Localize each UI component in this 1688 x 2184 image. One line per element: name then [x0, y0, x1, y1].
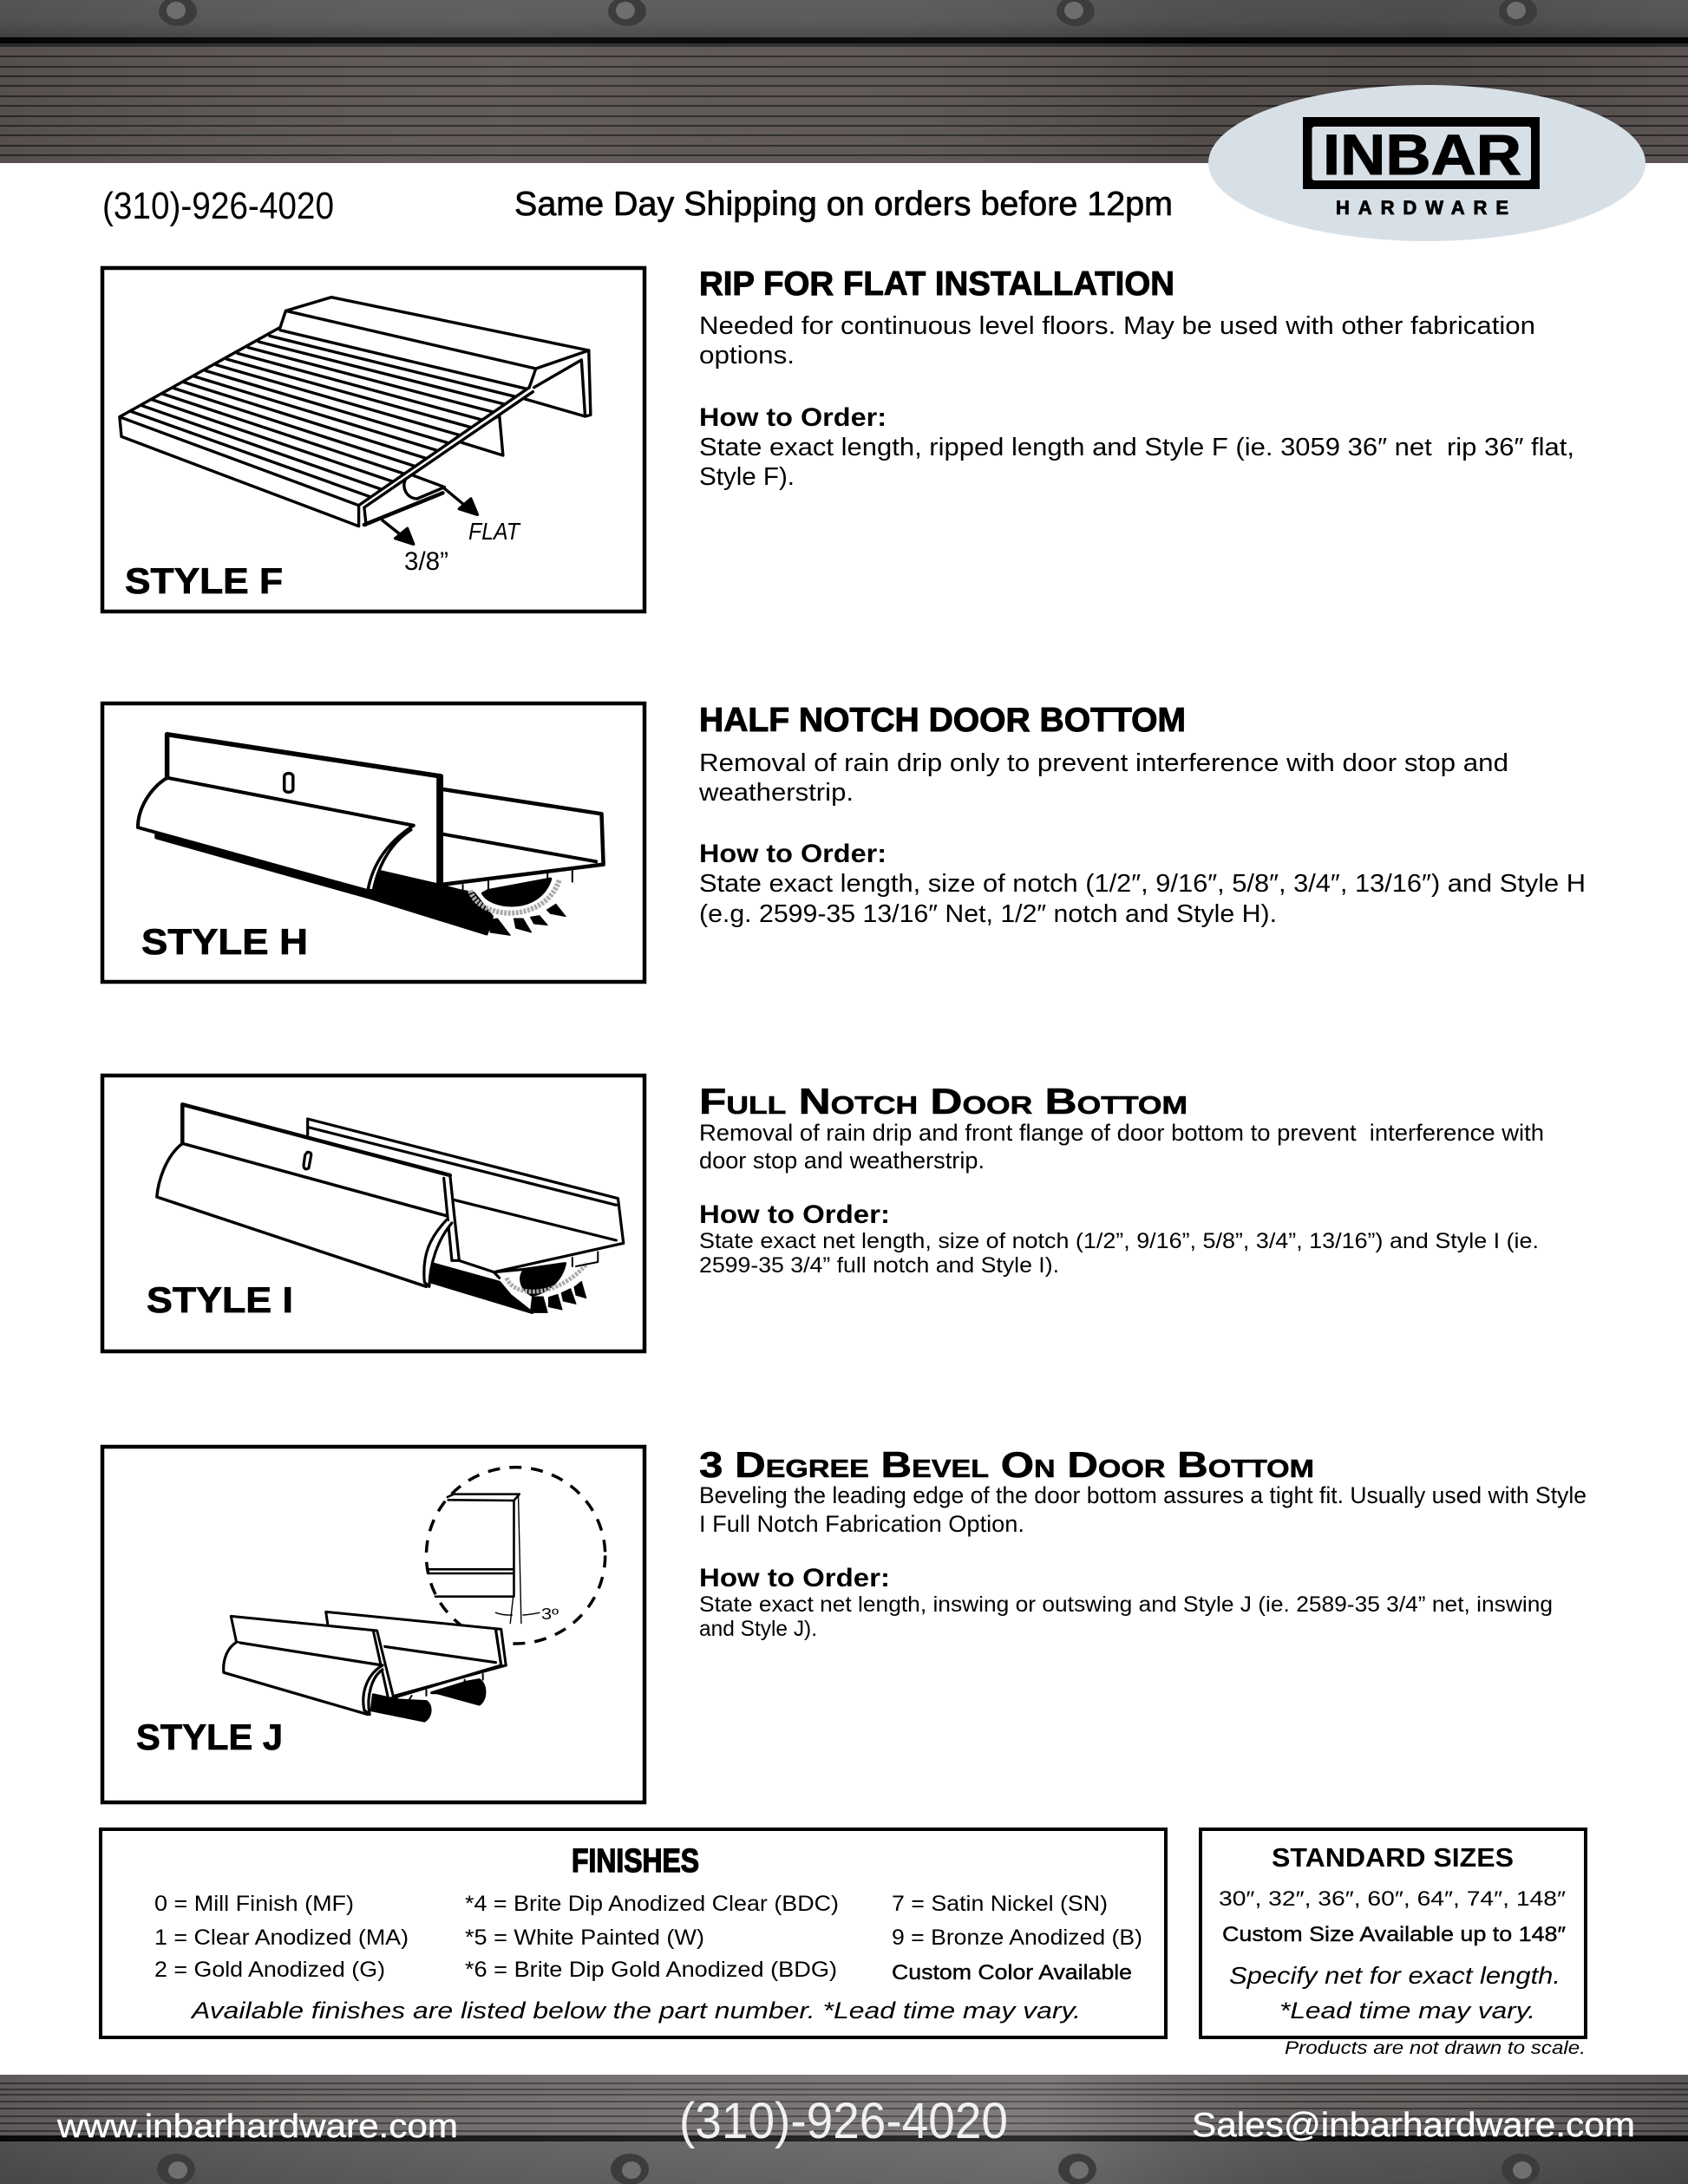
finish codes column 3: 9 = Bronze Anodized (B): [892, 1926, 1142, 1950]
how to order: 2599-35 3/4” full notch and Style I).: [699, 1253, 1059, 1278]
sizes heading: STANDARD SIZES: [1272, 1842, 1514, 1873]
how to order: How to Order:: [699, 1564, 890, 1592]
logo: Inbar Hardware: [1208, 85, 1645, 241]
panel: Style H diagram: [102, 703, 644, 982]
heading: Full Notch Door Bottom: [699, 1081, 1187, 1121]
style label H: STYLE H: [141, 921, 308, 962]
how to order: State exact net length, size of notch (1/2”, 9/16”, 5/8”, 3/4”, 13/16”) and Style I (ie.: [699, 1229, 1539, 1253]
how to order: State exact length, ripped length and Style F (ie. 3059 36″ net rip 36″ flat,: [699, 434, 1574, 461]
rivet 1: [159, 0, 197, 26]
description: options.: [699, 342, 795, 369]
rivet 4: [1502, 2154, 1540, 2184]
text block: rip for flat installation: [699, 265, 1574, 491]
panel: Style I diagram: [102, 1076, 644, 1351]
style label I: STYLE I: [147, 1279, 293, 1320]
finish codes column 2: *4 = Brite Dip Anodized Clear (BDC): [465, 1892, 839, 1916]
header phone number: (310)-926-4020: [102, 185, 334, 227]
finishes heading: FINISHES: [572, 1843, 699, 1880]
finish codes column 1: 0 = Mill Finish (MF): [154, 1892, 354, 1916]
how to order: How to Order:: [699, 1200, 890, 1229]
panel: Style J diagram: [102, 1447, 644, 1802]
rivet 4: [1499, 0, 1537, 26]
lead time note: *Lead time may vary.: [1279, 1998, 1535, 2024]
description: Needed for continuous level floors. May be used with other fabrication: [699, 312, 1535, 340]
description: [699, 1482, 1587, 1537]
text block: full notch door bottom: [699, 1081, 1544, 1278]
how to order: [699, 1564, 1553, 1641]
how to order: and Style J).: [699, 1617, 817, 1641]
rivet 2: [608, 0, 646, 26]
style label J: STYLE J: [136, 1716, 283, 1757]
finish codes column 2: *5 = White Painted (W): [465, 1926, 704, 1950]
finish codes column 3: Custom Color Available: [892, 1961, 1132, 1985]
description: Removal of rain drip only to prevent interference with door stop and: [699, 749, 1508, 777]
how to order: [699, 840, 1586, 928]
finish codes column 1: 2 = Gold Anodized (G): [154, 1958, 385, 1982]
shipping note: Same Day Shipping on orders before 12pm: [514, 186, 1173, 223]
finish codes column 3: 7 = Satin Nickel (SN): [892, 1892, 1108, 1916]
panel: finishes: [101, 1829, 1166, 2037]
finish codes column 1: [154, 1892, 409, 1982]
label: FLAT: FLAT: [468, 518, 521, 545]
finish codes column 3: [892, 1892, 1142, 1985]
footer metal band: [0, 2075, 1688, 2184]
finish codes column 1: 1 = Clear Anodized (MA): [154, 1926, 409, 1950]
label: 3 degrees: 3º: [541, 1605, 559, 1623]
footer website: www.inbarhardware.com: [56, 2109, 458, 2145]
scale disclaimer: Products are not drawn to scale.: [1285, 2038, 1586, 2058]
header metal band: [0, 0, 1688, 163]
how to order: State exact net length, inswing or outswing and Style J (ie. 2589-35 3/4” net, inswing: [699, 1592, 1553, 1617]
description: door stop and weatherstrip.: [699, 1148, 985, 1174]
description: [698, 749, 1508, 807]
footer phone number: (310)-926-4020: [679, 2093, 1008, 2149]
drawing: beveled door bottom: [224, 1468, 605, 1721]
how to order: How to Order:: [699, 403, 887, 432]
finishes note: Available finishes are listed below the part number. *Lead time may vary.: [190, 1998, 1081, 2024]
description: Beveling the leading edge of the door bottom assures a tight fit. Usually used with Style: [699, 1482, 1587, 1508]
finish codes column 2: *6 = Brite Dip Gold Anodized (BDG): [465, 1958, 837, 1982]
drawing: threshold ramp: [120, 298, 591, 544]
custom size note: Custom Size Available up to 148″: [1222, 1923, 1567, 1946]
how to order: [699, 1200, 1539, 1278]
text block: half notch door bottom: [698, 702, 1586, 928]
size list: 30″, 32″, 36″, 60″, 64″, 74″, 148″: [1219, 1887, 1567, 1911]
drawing: half notch door bottom: [138, 735, 604, 935]
finish codes column 2: [465, 1892, 839, 1982]
text block: 3 degree bevel: [699, 1444, 1587, 1641]
rivet 3: [1058, 2154, 1096, 2184]
description: Removal of rain drip and front flange of door bottom to prevent interference with: [699, 1120, 1544, 1146]
logo: Inbar Hardware: HARDWARE: [1336, 197, 1508, 219]
how to order: How to Order:: [699, 840, 887, 868]
label: 3/8 inch: 3/8”: [404, 547, 448, 576]
description: weatherstrip.: [698, 779, 854, 807]
how to order: State exact length, size of notch (1/2″, 9/16″, 5/8″, 3/4″, 13/16″) and Style H: [699, 870, 1586, 898]
rivet 3: [1057, 0, 1095, 26]
rivet 2: [611, 2154, 649, 2184]
heading: RIP FOR FLAT INSTALLATION: [699, 265, 1174, 303]
panel: standard sizes: [1201, 1829, 1586, 2037]
panel: Style F diagram: [102, 268, 644, 611]
footer email: Sales@inbarhardware.com: [1192, 2107, 1635, 2144]
how to order: (e.g. 2599-35 13/16″ Net, 1/2″ notch and Style H).: [699, 900, 1277, 928]
description: I Full Notch Fabrication Option.: [699, 1511, 1024, 1537]
style label F: STYLE F: [125, 560, 283, 601]
drawing: full notch door bottom: [157, 1104, 624, 1312]
heading: 3 Degree Bevel On Door Bottom: [699, 1444, 1314, 1485]
heading: HALF NOTCH DOOR BOTTOM: [699, 702, 1186, 739]
specify note: Specify net for exact length.: [1229, 1962, 1560, 1989]
description: [699, 1120, 1544, 1174]
rivet 1: [157, 2154, 195, 2184]
how to order: [699, 403, 1574, 491]
description: [699, 312, 1535, 369]
logo: Inbar Hardware: INBAR: [1323, 122, 1521, 186]
how to order: Style F).: [699, 463, 795, 491]
